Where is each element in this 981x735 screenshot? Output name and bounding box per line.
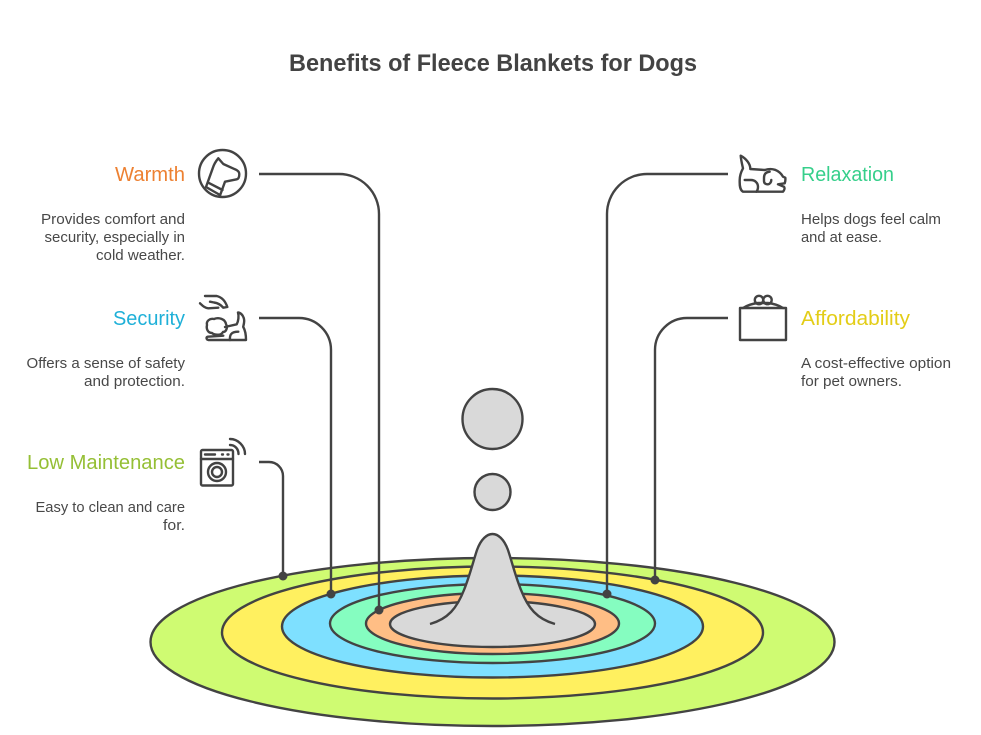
connector: security: [259, 318, 336, 598]
icon: relaxed dog: [740, 156, 785, 192]
ring: centre: [390, 601, 595, 647]
text: warmth description: Provides comfort and: [41, 211, 185, 228]
connector: relaxation: [602, 174, 728, 598]
water splash peak: [430, 534, 555, 624]
icon: dog head in circle: [199, 150, 246, 197]
text: security description: and protection.: [84, 373, 185, 390]
block: affordability: [801, 308, 951, 390]
connector: affordability: [650, 318, 728, 584]
connector: warmth: [259, 174, 384, 614]
text: relaxation description: [801, 211, 941, 246]
ring: low maintenance: [150, 558, 834, 726]
heading: security: Security: [113, 308, 185, 330]
heading: relaxation: Relaxation: [801, 164, 894, 186]
ring: warmth: [366, 593, 619, 654]
text: low maintenance description: for.: [163, 517, 185, 534]
text: affordability description: for pet owners.: [801, 373, 902, 390]
title: Benefits of Fleece Blankets for Dogs: [289, 50, 697, 77]
ring: security: [282, 576, 703, 678]
text: warmth description: [41, 211, 185, 264]
text: relaxation description: Helps dogs feel calm: [801, 211, 941, 228]
text: security description: Offers a sense of safety: [26, 355, 185, 372]
text: low maintenance description: Easy to clean and care: [36, 499, 185, 516]
text: affordability description: A cost-effective option: [801, 355, 951, 372]
text: warmth description: security, especially in: [44, 229, 185, 246]
block: warmth: [41, 164, 185, 264]
text: security description: [26, 355, 185, 390]
text: low maintenance description: [36, 499, 185, 534]
heading: low maintenance: Low Maintenance: [27, 452, 185, 474]
connector: low maintenance: [259, 462, 288, 580]
text: warmth description: cold weather.: [96, 247, 185, 264]
ring: affordability: [222, 566, 763, 698]
text: relaxation description: and at ease.: [801, 229, 882, 246]
text: affordability description: [801, 355, 951, 390]
icon: washing machine with signal: [201, 439, 245, 486]
large droplet: [462, 389, 522, 449]
heading: affordability: Affordability: [801, 308, 910, 330]
icon: hand petting dog: [200, 296, 246, 340]
block: security: [26, 308, 185, 390]
heading: warmth: Warmth: [115, 164, 185, 186]
ripple target chart: [150, 389, 834, 726]
icon: food bowl box: [740, 296, 786, 340]
block: relaxation: [801, 164, 941, 246]
ring: relaxation: [330, 584, 655, 663]
small droplet: [474, 474, 510, 510]
block: low maintenance: [27, 452, 185, 534]
